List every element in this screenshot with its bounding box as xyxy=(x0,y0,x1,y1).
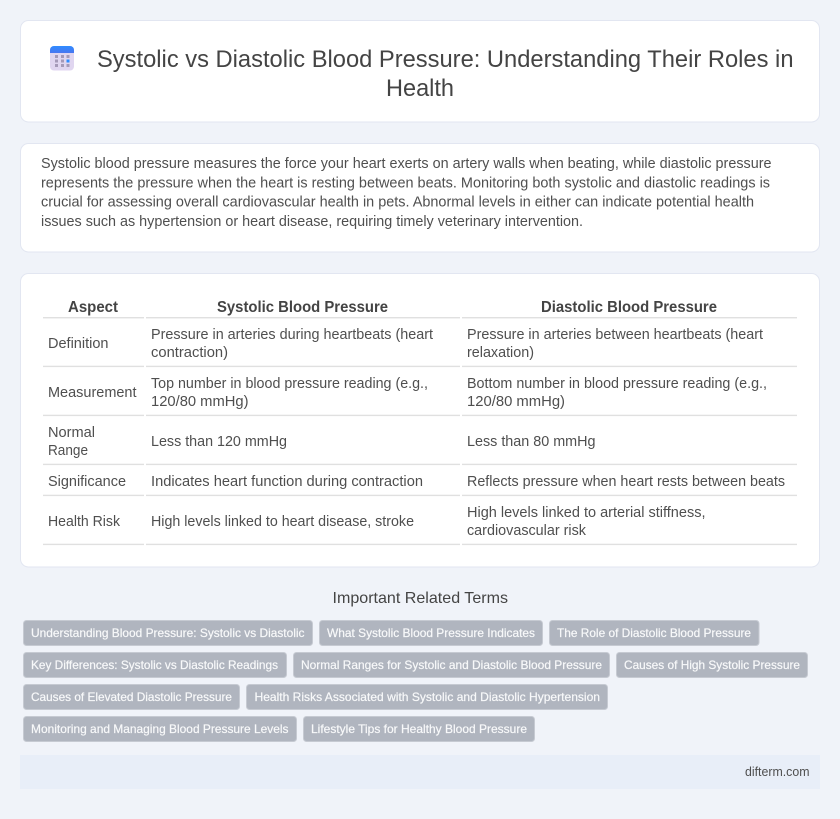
row: definition: Definition xyxy=(48,336,108,352)
tag: What Systolic Blood Pressure Indicates xyxy=(327,626,535,640)
tag xyxy=(24,716,296,742)
tag xyxy=(24,652,286,678)
row: measurement: 120/80 mmHg) xyxy=(467,394,565,410)
row: definition: Pressure in arteries during heartbeats (heart xyxy=(151,327,433,343)
table header: Systolic Blood Pressure xyxy=(217,299,388,316)
tag xyxy=(294,652,610,678)
row: health risk: High levels linked to heart disease, stroke xyxy=(151,514,414,530)
table header: Aspect xyxy=(68,299,118,316)
panel: introduction xyxy=(20,144,820,252)
table header xyxy=(68,299,717,316)
tag xyxy=(246,684,608,710)
tag xyxy=(304,716,534,742)
text block: intro paragraph: represents the pressure when the heart is resting between beats. Monitoring both systolic and diastolic readings is xyxy=(41,176,770,192)
row: health risk xyxy=(48,505,706,539)
row: significance: Reflects pressure when heart rests between beats xyxy=(467,474,785,490)
tag xyxy=(24,620,312,646)
row: measurement: Top number in blood pressure reading (e.g., xyxy=(151,376,428,392)
tag: Causes of High Systolic Pressure xyxy=(624,658,800,672)
text block: intro paragraph: crucial for assessing overall cardiovascular health in pets. Abnormal levels in either can indicate potential health xyxy=(41,194,754,210)
row: measurement xyxy=(48,376,767,410)
row: measurement: Measurement xyxy=(48,385,136,401)
row: health risk: Health Risk xyxy=(48,514,121,530)
row: normal range: Less than 120 mmHg xyxy=(151,434,287,450)
row: normal range: Less than 80 mmHg xyxy=(467,434,596,450)
row: significance: Indicates heart function during contraction xyxy=(151,474,423,490)
text block: intro paragraph: Systolic blood pressure measures the force your heart exerts on artery walls when beating, while diastolic pressure xyxy=(41,156,772,172)
tag xyxy=(616,652,808,678)
text block: intro paragraph: issues such as hypertension or heart disease, requiring timely veterinary intervention. xyxy=(41,214,583,230)
tag xyxy=(320,620,542,646)
panel: comparison table xyxy=(20,274,820,567)
row: measurement: Bottom number in blood pressure reading (e.g., xyxy=(467,376,767,392)
row: definition: contraction) xyxy=(151,345,228,361)
table header: Diastolic Blood Pressure xyxy=(541,299,717,316)
tag: Health Risks Associated with Systolic and Diastolic Hypertension xyxy=(254,690,600,704)
title: Health xyxy=(386,75,454,102)
tag: The Role of Diastolic Blood Pressure xyxy=(557,626,751,640)
title xyxy=(97,46,794,102)
related term tags xyxy=(24,620,808,742)
tag: Normal Ranges for Systolic and Diastolic Blood Pressure xyxy=(301,658,602,672)
title: Systolic vs Diastolic Blood Pressure: Understanding Their Roles in xyxy=(97,46,794,73)
tag xyxy=(24,684,240,710)
row: normal range: Range xyxy=(48,443,88,459)
row: definition xyxy=(48,327,763,361)
row: significance: Significance xyxy=(48,474,126,490)
text block: intro paragraph xyxy=(41,156,772,230)
icon: calendar xyxy=(50,46,74,70)
footer xyxy=(20,755,820,789)
heading: related terms: Important Related Terms xyxy=(332,590,508,607)
tag: Monitoring and Managing Blood Pressure Levels xyxy=(31,722,288,736)
row: health risk: High levels linked to arterial stiffness, xyxy=(467,505,706,521)
panel: title header xyxy=(20,20,820,122)
row: measurement: 120/80 mmHg) xyxy=(151,394,248,410)
row: normal range xyxy=(48,425,596,459)
row: normal range: Normal xyxy=(48,425,95,441)
tag: Understanding Blood Pressure: Systolic vs Diastolic xyxy=(31,626,304,640)
tag xyxy=(550,620,759,646)
row: significance xyxy=(48,474,785,490)
tag: Causes of Elevated Diastolic Pressure xyxy=(31,690,232,704)
footer: difterm.com xyxy=(745,765,810,779)
tag: Key Differences: Systolic vs Diastolic Readings xyxy=(31,658,278,672)
row: definition: relaxation) xyxy=(467,345,534,361)
row: definition: Pressure in arteries between heartbeats (heart xyxy=(467,327,763,343)
tag: Lifestyle Tips for Healthy Blood Pressure xyxy=(311,722,527,736)
row: health risk: cardiovascular risk xyxy=(467,523,587,539)
